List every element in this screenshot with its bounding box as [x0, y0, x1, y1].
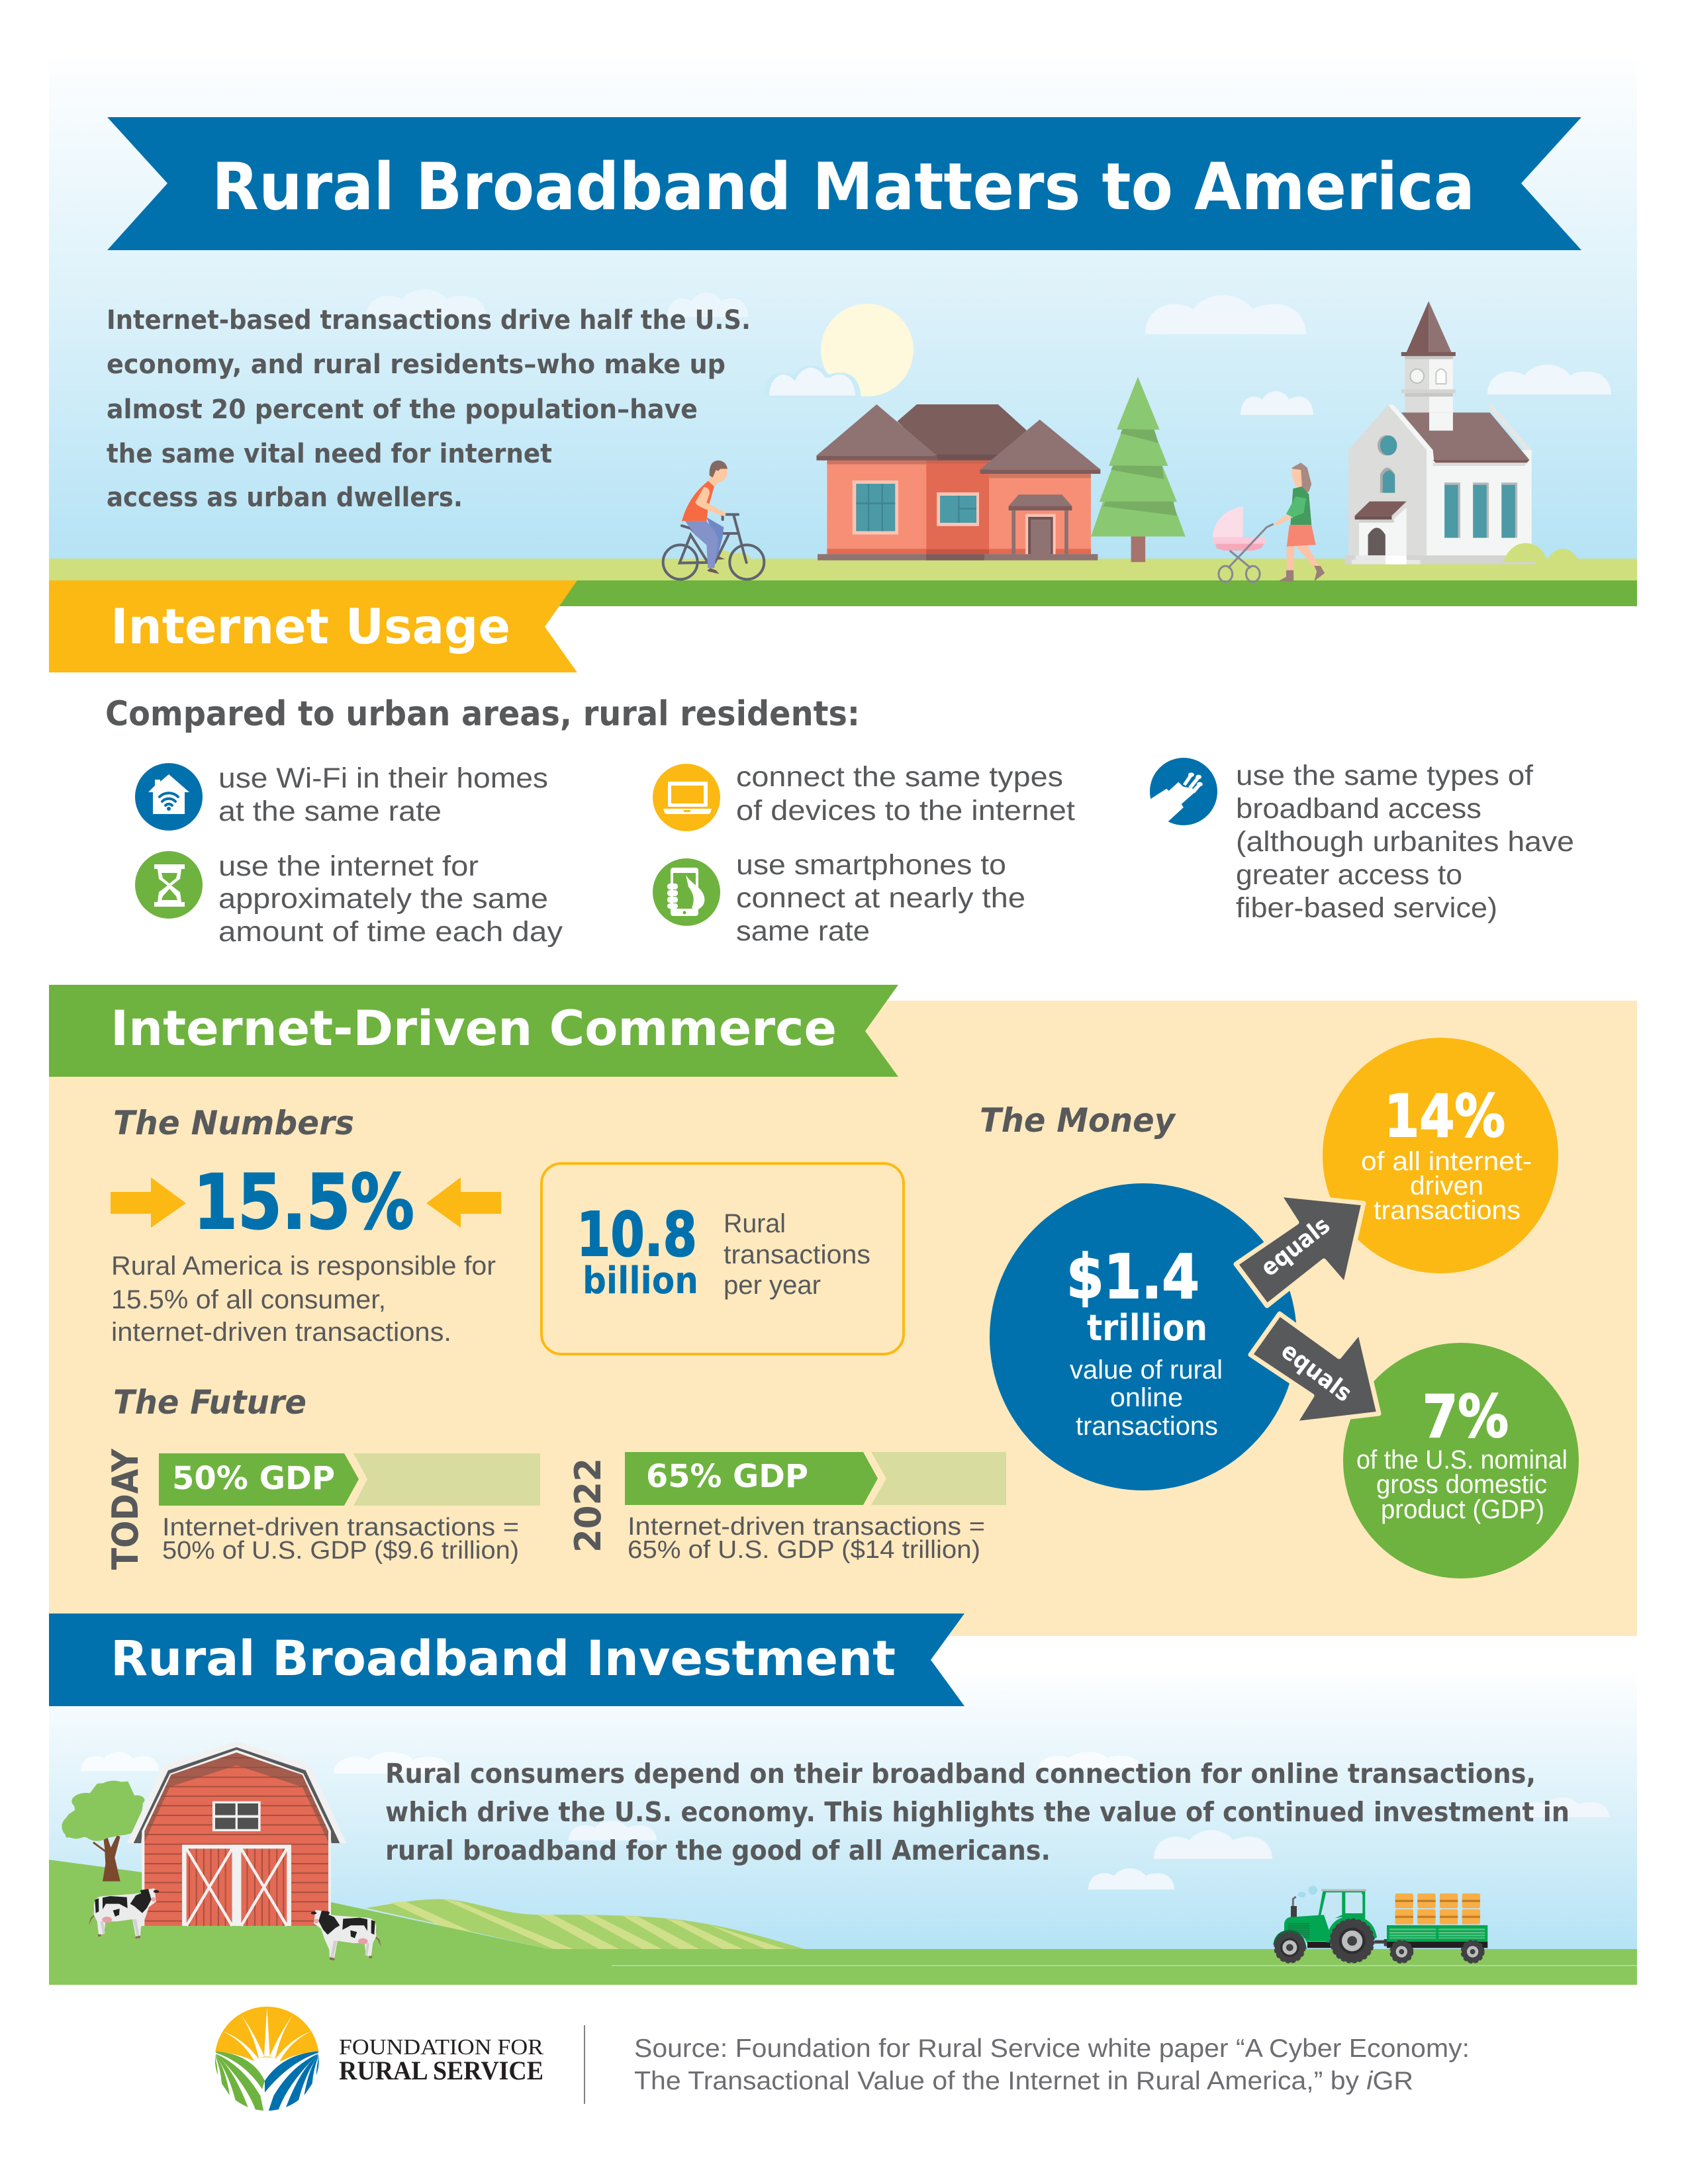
numbers description — [111, 1251, 496, 1347]
progress bar 50% — [159, 1453, 540, 1506]
barn — [127, 1741, 346, 1926]
circle: 14% — [1323, 1038, 1558, 1273]
circle: 14%: 14% — [1384, 1082, 1505, 1150]
heading: The Future: The Future — [113, 1383, 306, 1422]
progress bar 65% — [625, 1452, 1006, 1505]
investment text: rural broadband for the good of all Americans. — [385, 1835, 1051, 1866]
progress bar 50%: 50% GDP — [172, 1460, 335, 1497]
arrow: equals to 14%: equals — [1256, 1212, 1335, 1282]
circle: 14%: driven — [1410, 1171, 1483, 1201]
future 2022: 65% of U.S. GDP ($14 trillion) — [628, 1536, 980, 1564]
item: smartphones: same rate — [736, 915, 870, 947]
house — [816, 404, 1100, 561]
item: wi-fi in homes: use Wi-Fi in their homes — [218, 762, 548, 794]
logo: Foundation for Rural Service: RURAL SERVICE — [339, 2056, 543, 2085]
circle: 7%: gross domestic — [1376, 1470, 1547, 1499]
intro text: the same vital need for internet — [107, 439, 552, 469]
smoke — [1298, 1886, 1317, 1897]
callout: 10.8 billion: billion — [583, 1259, 698, 1302]
barn with tree and cows — [62, 1741, 381, 1960]
investment text: which drive the U.S. economy. This highlights the value of continued investment in — [385, 1796, 1570, 1828]
woman with stroller — [1213, 463, 1325, 582]
intro text — [107, 305, 751, 513]
intro text: Internet-based transactions drive half the U.S. — [107, 305, 751, 336]
item: broadband access — [1141, 758, 1574, 924]
cyclist — [663, 461, 764, 579]
stat: 15.5% with arrows: 15.5% — [193, 1158, 414, 1246]
circle: $1.4 trillion: trillion — [1087, 1307, 1207, 1349]
source: Source: Foundation for Rural Service white paper “A Cyber Economy: — [634, 2034, 1470, 2063]
item: devices — [653, 761, 1075, 831]
item: broadband access: broadband access — [1236, 793, 1481, 825]
callout: 10.8 billion: per year — [724, 1271, 821, 1300]
intro text: economy, and rural residents–who make up — [107, 349, 726, 380]
icon: hand holding phone — [653, 858, 720, 926]
item: smartphones: use smartphones to — [736, 849, 1006, 881]
callout: 10.8 billion: 10.8 — [577, 1199, 697, 1270]
source — [634, 2034, 1470, 2095]
sun and clouds — [767, 295, 1611, 415]
tractor with hay wagon — [1273, 1886, 1487, 1963]
future 2022: 2022 — [567, 1458, 609, 1553]
faint clouds behind intro — [366, 289, 748, 318]
item: broadband access: use the same types of — [1236, 760, 1534, 792]
section ribbon: Internet Usage: Internet Usage — [111, 599, 510, 655]
item: devices: of devices to the internet — [736, 795, 1075, 827]
circle: $1.4 trillion: value of rural — [1070, 1355, 1223, 1385]
item: time online: amount of time each day — [218, 916, 563, 948]
section ribbon: Internet Usage — [49, 580, 577, 672]
divider — [584, 2025, 585, 2104]
logo mark — [215, 2004, 319, 2113]
future today: TODAY — [105, 1448, 146, 1570]
future today: Internet-driven transactions = — [162, 1514, 519, 1541]
title banner: Rural Broadband Matters to America — [212, 150, 1475, 225]
progress bar 65%: 65% GDP — [646, 1458, 808, 1495]
tree — [62, 1781, 144, 1882]
panel: investment scene sky — [49, 1674, 1637, 1949]
item: smartphones: connect at nearly the — [736, 882, 1025, 914]
ground strips — [49, 559, 1637, 606]
arrow: equals to 7%: equals — [1276, 1337, 1357, 1408]
source: The Transactional Value of the Internet in Rural America,” by iGR — [634, 2067, 1413, 2095]
circle: 7% — [1343, 1343, 1579, 1578]
circle: $1.4 trillion: transactions — [1076, 1412, 1218, 1441]
usage subheading: Compared to urban areas, rural residents: — [105, 694, 860, 734]
circle: 7%: of the U.S. nominal — [1356, 1445, 1568, 1475]
icon: laptop — [653, 764, 720, 831]
arrow left — [426, 1177, 501, 1228]
future 2022: Internet-driven transactions = — [628, 1513, 985, 1541]
striped hill — [366, 1899, 804, 1949]
item: time online: approximately the same — [218, 883, 548, 915]
logo: Foundation for Rural Service — [215, 2004, 543, 2113]
section ribbon: Internet-Driven Commerce: Internet-Driven Commerce — [111, 1001, 837, 1057]
future today — [105, 1448, 540, 1570]
arrow: equals to 7% — [1250, 1314, 1379, 1424]
title banner — [107, 117, 1581, 250]
clouds in investment scene — [81, 1752, 1609, 1889]
item: devices: connect the same types — [736, 761, 1063, 793]
callout: 10.8 billion: Rural — [724, 1209, 786, 1238]
section ribbon: Rural Broadband Investment: Rural Broadband Investment — [111, 1631, 896, 1687]
icon: hand with fiber — [1141, 758, 1217, 826]
item: time online — [135, 850, 563, 948]
section ribbon: Rural Broadband Investment — [49, 1614, 964, 1706]
callout: 10.8 billion: transactions — [724, 1240, 870, 1269]
circle: $1.4 trillion: online — [1110, 1383, 1183, 1412]
item: broadband access: (although urbanites have — [1236, 826, 1574, 858]
circle: 7%: product (GDP) — [1381, 1495, 1544, 1524]
church — [1344, 301, 1579, 565]
panel: commerce background — [49, 1001, 1637, 1636]
intro text: almost 20 percent of the population–have — [107, 394, 698, 425]
item: broadband access: greater access to — [1236, 859, 1462, 891]
circle: $1.4 trillion — [990, 1183, 1297, 1490]
hay bales — [1395, 1893, 1480, 1925]
heading: The Numbers: The Numbers — [113, 1104, 354, 1142]
numbers description: internet-driven transactions. — [111, 1318, 451, 1347]
arrow right — [111, 1177, 186, 1228]
item: time online: use the internet for — [218, 850, 479, 882]
cow left — [89, 1888, 159, 1938]
icon: hourglass — [135, 851, 203, 919]
callout: 10.8 billion — [541, 1163, 904, 1354]
future today: 50% of U.S. GDP ($9.6 trillion) — [162, 1537, 519, 1565]
icon: wi-fi house — [135, 763, 203, 831]
numbers description: 15.5% of all consumer, — [111, 1285, 386, 1314]
numbers description: Rural America is responsible for — [111, 1251, 496, 1281]
heading: The Money: The Money — [980, 1101, 1176, 1140]
section ribbon: Internet-Driven Commerce — [49, 985, 898, 1077]
cow right — [311, 1910, 381, 1960]
investment text: Rural consumers depend on their broadband connection for online transactions, — [385, 1758, 1536, 1790]
wheels — [1273, 1919, 1483, 1963]
future 2022 — [567, 1452, 1006, 1564]
top sky panel — [49, 60, 1637, 559]
circle: 7%: 7% — [1423, 1383, 1509, 1451]
item: smartphones — [653, 849, 1025, 947]
pine tree — [1091, 377, 1186, 562]
item: wi-fi in homes — [135, 762, 548, 831]
arrow: equals to 14% — [1236, 1195, 1364, 1306]
investment text — [385, 1758, 1570, 1866]
intro text: access as urban dwellers. — [107, 482, 463, 513]
circle: 14%: transactions — [1374, 1196, 1521, 1225]
stat: 15.5% with arrows — [111, 1158, 501, 1246]
circle: 14%: of all internet- — [1361, 1147, 1532, 1176]
ground hill and field — [49, 1860, 1637, 1985]
logo: Foundation for Rural Service: FOUNDATION FOR — [339, 2035, 543, 2060]
item: wi-fi in homes: at the same rate — [218, 796, 442, 827]
item: broadband access: fiber-based service) — [1236, 892, 1497, 924]
wagon — [1384, 1925, 1487, 1948]
circle: $1.4 trillion: $1.4 — [1066, 1242, 1199, 1312]
